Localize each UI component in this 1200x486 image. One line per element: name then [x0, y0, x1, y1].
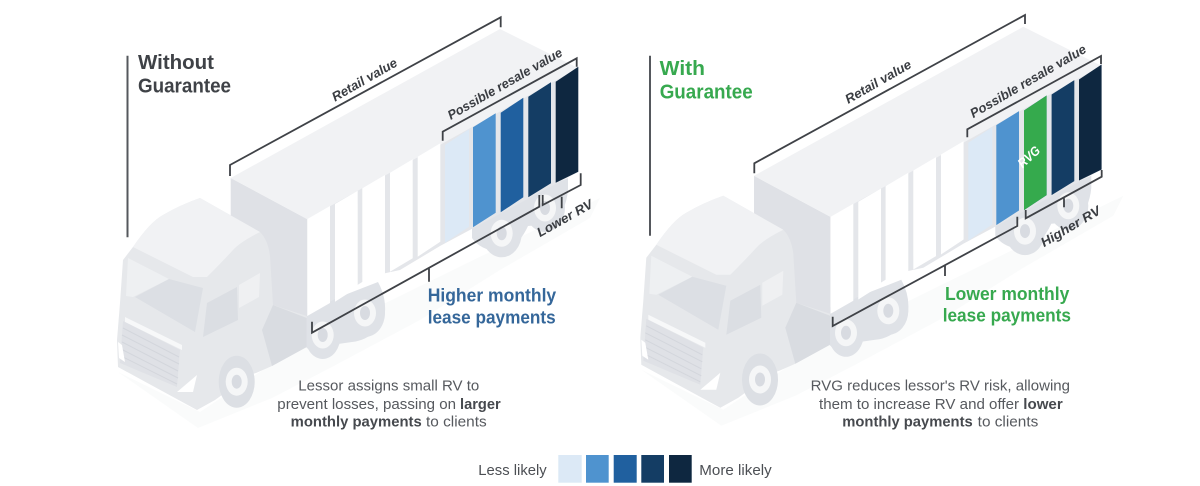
- bracket: lower RV: [543, 173, 581, 208]
- callout: higher monthly lease payments: lease payments: [428, 307, 556, 327]
- text block: with guarantee explanation: RVG reduces lessor's RV risk, allowing: [811, 379, 1070, 395]
- label: possible resale value: Possible resale value: [967, 41, 1089, 121]
- text block: without guarantee explanation: prevent losses, passing on: [277, 397, 456, 413]
- text block: without guarantee explanation: monthly payments: [291, 415, 422, 431]
- text block: without guarantee explanation: to clients: [426, 415, 487, 431]
- callout: lower monthly lease payments: Lower monthly: [945, 284, 1069, 304]
- heading: without guarantee: [138, 52, 231, 97]
- heading: without guarantee: Without: [138, 52, 214, 74]
- bracket: higher RV: [1026, 170, 1102, 218]
- callout: lower monthly lease payments: lease payments: [943, 306, 1071, 326]
- bracket: retail value: [754, 15, 1025, 173]
- heading: with guarantee: [660, 58, 753, 103]
- text block: with guarantee explanation: to clients: [978, 415, 1038, 431]
- text block: with guarantee explanation: [811, 379, 1070, 431]
- heading: with guarantee: Guarantee: [660, 81, 753, 103]
- text block: with guarantee explanation: lower: [1023, 397, 1063, 413]
- label: possible resale value: Possible resale value: [445, 45, 565, 123]
- bracket: retail value: [230, 17, 501, 176]
- legend swatches: [558, 455, 692, 483]
- label: higher RV: Higher RV: [1038, 202, 1104, 250]
- label: retail value: Retail value: [329, 55, 400, 104]
- text block: with guarantee explanation: them to increase RV and offer: [819, 397, 1019, 413]
- callout: higher monthly lease payments: [428, 286, 556, 327]
- bracket: possible resale value: [967, 56, 1101, 137]
- text block: with guarantee explanation: monthly payments: [842, 415, 973, 431]
- label: RVG: RVG: [1014, 143, 1043, 171]
- legend label: more likely: More likely: [699, 463, 772, 479]
- illustration: truck with RVG bar: [640, 27, 1123, 426]
- bracket: possible resale value: [443, 58, 577, 141]
- text block: without guarantee explanation: [277, 379, 501, 431]
- bracket: monthly payment span: [833, 217, 1017, 326]
- heading: with guarantee: With: [660, 58, 705, 80]
- legend label: less likely: Less likely: [478, 463, 547, 479]
- panel: without guarantee: [117, 17, 600, 431]
- label: lower RV: Lower RV: [534, 196, 597, 240]
- panel: with guarantee: [640, 15, 1123, 431]
- text block: without guarantee explanation: Lessor assigns small RV to: [298, 379, 479, 395]
- rule: with guarantee: [649, 56, 651, 236]
- callout: higher monthly lease payments: Higher monthly: [428, 286, 556, 306]
- illustration: truck with blue value bars: [117, 29, 600, 428]
- text block: without guarantee explanation: larger: [460, 397, 501, 413]
- bracket: monthly payment span: [312, 195, 539, 333]
- bar: RVG: [1024, 96, 1047, 210]
- rule: without guarantee: [126, 56, 128, 237]
- legend: [478, 455, 772, 483]
- heading: without guarantee: Guarantee: [138, 75, 231, 97]
- callout: lower monthly lease payments: [943, 284, 1071, 326]
- label: retail value: Retail value: [842, 57, 914, 107]
